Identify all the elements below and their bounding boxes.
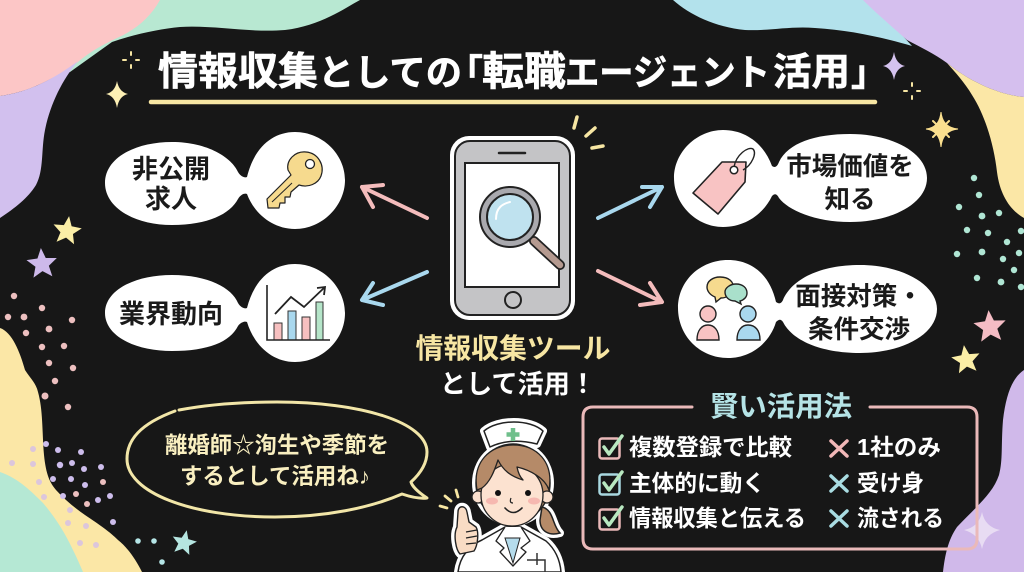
- title: 転職: [482, 50, 566, 94]
- title: としての: [318, 52, 462, 93]
- dots: mint: [135, 175, 1024, 565]
- central caption: [416, 333, 610, 399]
- arrow: to 面接対策: [598, 271, 662, 305]
- face: [472, 491, 484, 503]
- do list: 主体的に動く: [629, 470, 765, 496]
- don't list: 流される: [857, 505, 944, 531]
- don't list: [831, 434, 944, 531]
- dots: lilac left: [9, 441, 116, 548]
- ponytail: [540, 507, 560, 534]
- title underline: [151, 100, 875, 104]
- title: エージェント: [565, 52, 770, 93]
- icon: key: [267, 152, 322, 208]
- panel heading: 賢い活用法: [710, 391, 852, 422]
- don't list: 受け身: [857, 470, 924, 496]
- title: 情報収集: [158, 51, 318, 94]
- speech bubble: するとして活用ね♪: [180, 464, 370, 489]
- node: 面接対策・条件交渉: [678, 260, 937, 358]
- dots: pink left: [5, 293, 106, 507]
- central caption: 情報収集ツール: [416, 333, 610, 364]
- label: 求人: [145, 184, 197, 214]
- title: 」: [851, 52, 887, 93]
- title: 「: [447, 52, 483, 93]
- nurse character: [440, 422, 561, 572]
- phone emphasis rays: [574, 117, 603, 148]
- thumbs-up hand: [455, 507, 478, 554]
- label: 知る: [824, 186, 876, 214]
- node: 市場価値を知る: [674, 130, 927, 227]
- nurse cap: [484, 422, 543, 447]
- icon: price tag: [693, 148, 754, 214]
- arrow: to 市場価値を知る: [598, 187, 662, 218]
- hair back: [476, 444, 550, 522]
- speech bubble: 離婚師☆洵生や季節を: [165, 433, 389, 458]
- central caption: として活用！: [440, 369, 596, 399]
- don't list: 1社のみ: [857, 434, 941, 460]
- do list: 複数登録で比較: [629, 434, 792, 460]
- speech bubble: [127, 402, 427, 517]
- panel frame: [583, 407, 977, 549]
- icon: magnifier: [480, 187, 560, 265]
- panel: 賢い活用法: [583, 391, 977, 549]
- title: [158, 50, 887, 94]
- node: 非公開求人: [105, 132, 345, 229]
- white sticker outline: [455, 422, 561, 572]
- title: 活用: [773, 52, 850, 94]
- icon: bar chart: [267, 285, 330, 340]
- label: 業界動向: [119, 299, 223, 329]
- arrow: to 非公開求人: [362, 185, 427, 218]
- label: 条件交渉: [808, 316, 910, 344]
- white pill and circle: [678, 260, 937, 358]
- label: 面接対策・: [795, 283, 923, 311]
- white pill and circle: [105, 264, 345, 362]
- node: 業界動向: [105, 264, 345, 362]
- label: 市場価値を: [786, 153, 914, 181]
- do list: [600, 434, 806, 531]
- icon: people talking: [697, 277, 760, 340]
- do list: 情報収集と伝える: [629, 505, 806, 531]
- white pill and circle: [674, 130, 927, 227]
- label: 非公開: [132, 154, 210, 184]
- coat: [458, 527, 561, 572]
- arrow: to 業界動向: [362, 272, 427, 305]
- central smartphone with magnifier: [450, 117, 603, 320]
- white pill and circle: [105, 132, 345, 229]
- sparkle marks: [440, 490, 458, 508]
